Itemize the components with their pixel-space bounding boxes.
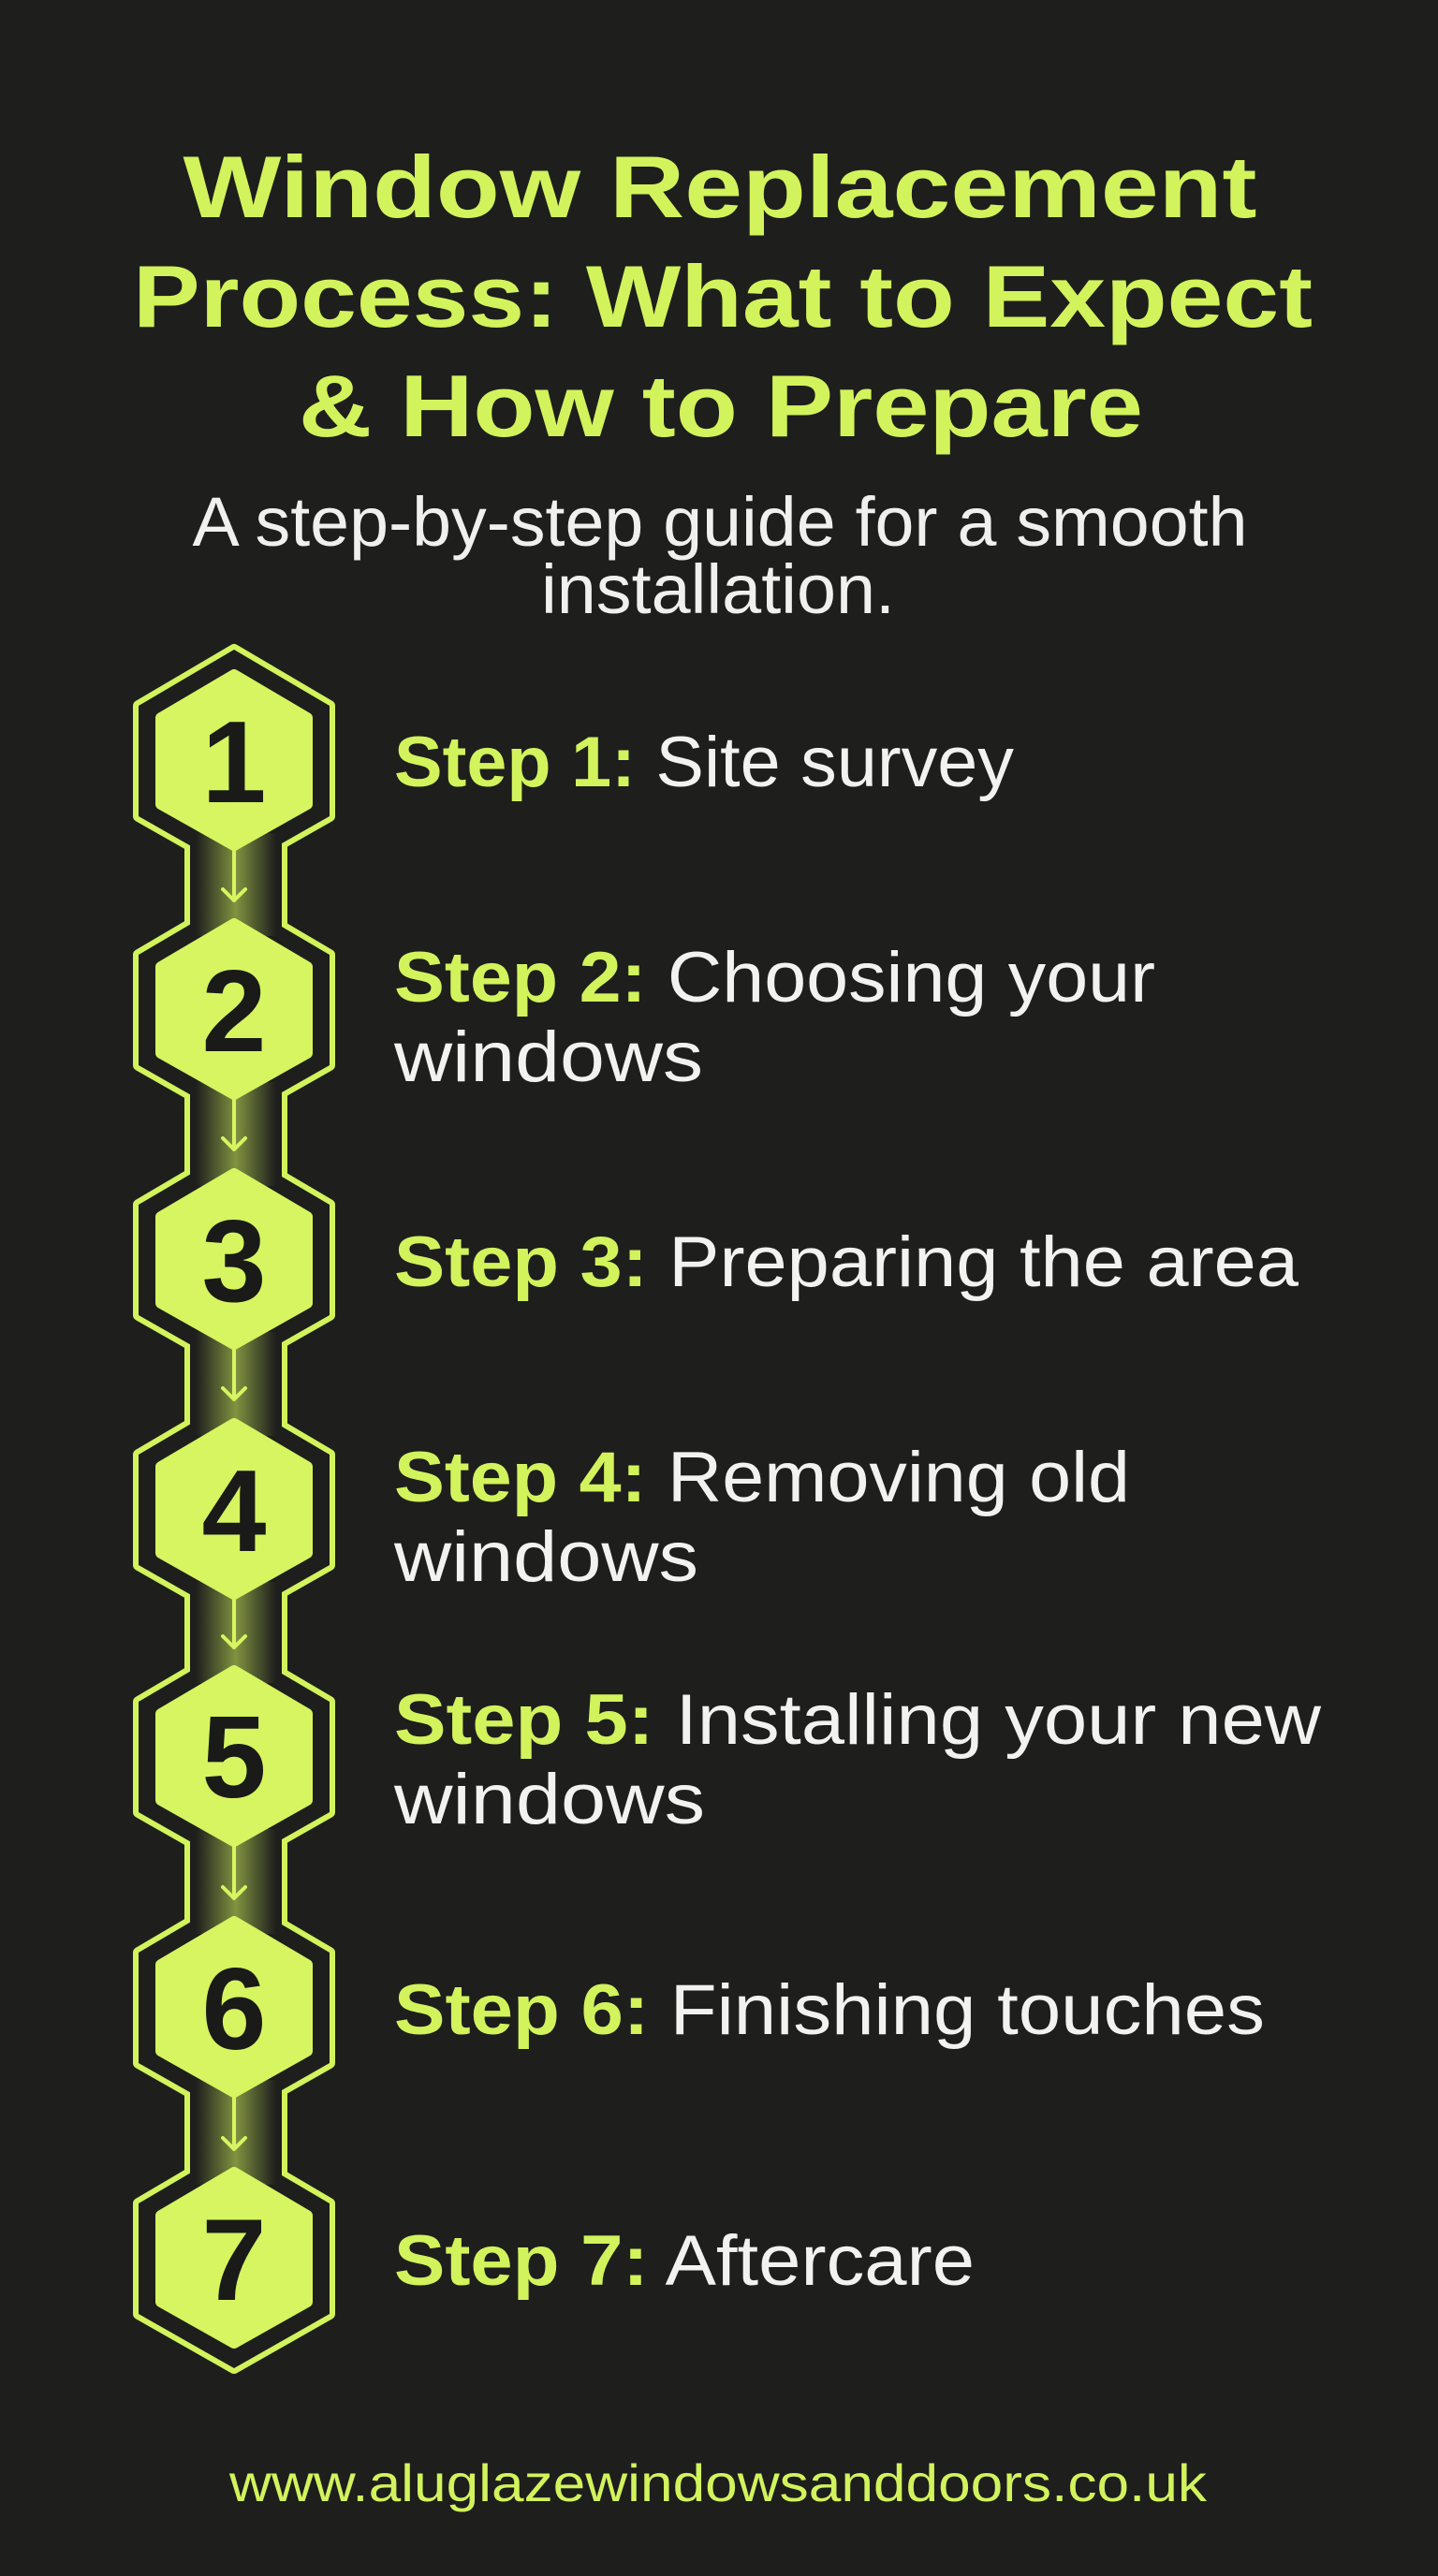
step timeline: 3 xyxy=(202,1197,266,1326)
footer url: www.aluglazewindowsanddoors.co.uk xyxy=(228,2453,1208,2512)
step timeline: 2 xyxy=(202,947,266,1076)
arrows xyxy=(223,847,245,2149)
title: Window Replacement xyxy=(183,138,1256,236)
step timeline: 1 xyxy=(202,698,266,827)
subtitle: A step-by-step guide for a smooth xyxy=(193,483,1247,561)
step timeline: 4 xyxy=(202,1447,267,1576)
step 5 xyxy=(393,1680,1322,1839)
step 4: Step 4: Removing old xyxy=(394,1438,1130,1517)
title: & How to Prepare xyxy=(299,357,1143,455)
step timeline: 7 xyxy=(202,2196,266,2325)
subtitle: installation. xyxy=(541,550,895,628)
step 5: windows xyxy=(393,1760,705,1839)
step 3: Step 3: Preparing the area xyxy=(394,1222,1299,1302)
step 5: Step 5: Installing your new xyxy=(394,1680,1322,1760)
step texts xyxy=(393,723,1322,2301)
step 2: windows xyxy=(393,1017,703,1097)
step 2 xyxy=(393,938,1155,1097)
title: Process: What to Expect xyxy=(133,247,1313,345)
step timeline: 5 xyxy=(202,1693,266,1822)
number hexagons xyxy=(161,675,307,2343)
step timeline xyxy=(139,650,330,2368)
step 4: windows xyxy=(393,1517,698,1597)
subtitle xyxy=(193,483,1247,628)
step timeline: 6 xyxy=(202,1945,266,2074)
step 2: Step 2: Choosing your xyxy=(394,938,1155,1017)
step 4 xyxy=(393,1438,1130,1597)
title xyxy=(133,138,1313,455)
step 1: Step 1: Site survey xyxy=(394,723,1014,802)
step 6: Step 6: Finishing touches xyxy=(394,1970,1265,2050)
step 7: Step 7: Aftercare xyxy=(394,2221,975,2301)
